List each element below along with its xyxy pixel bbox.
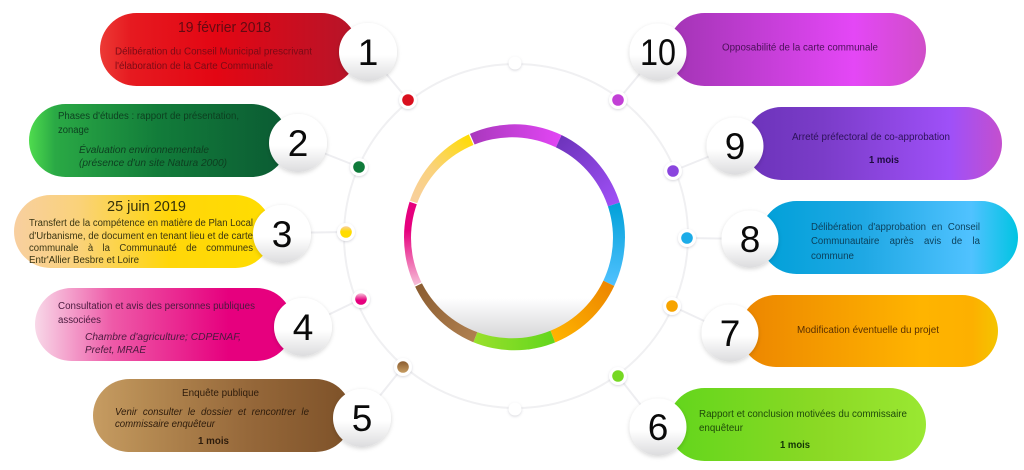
step 4 description: Prefet, MRAE — [85, 345, 146, 356]
step 2 — [29, 104, 327, 177]
step 5 description: Enquête publique — [182, 388, 259, 399]
step 1 — [100, 13, 397, 86]
number 3 — [253, 205, 311, 263]
number 9 — [706, 118, 764, 174]
step 1 date: 19 février 2018 — [178, 20, 271, 36]
step 9 description — [792, 132, 950, 166]
step 5 description: commissaire enquêteur — [115, 419, 216, 430]
step 8 description: Communautaire après avis de la — [811, 236, 980, 247]
number 6: 6 — [648, 407, 668, 448]
step 3 description: communale à la Communauté de communes — [29, 243, 253, 254]
step 1 description — [115, 46, 312, 72]
number 2: 2 — [288, 123, 308, 164]
number 7 — [702, 304, 758, 362]
step 2 description: (présence d'un site Natura 2000) — [79, 158, 227, 169]
number 1 — [339, 23, 397, 81]
step 2 description: Phases d'études : rapport de présentation, — [58, 111, 239, 122]
step 6 — [630, 388, 926, 461]
step 2 description: Évaluation environnementale — [79, 143, 209, 156]
step 6 description — [699, 409, 907, 451]
step 4 description: Chambre d'agriculture; CDPENAF, — [85, 332, 241, 343]
number 9: 9 — [725, 126, 745, 167]
number 7: 7 — [720, 313, 740, 354]
step 4 — [35, 288, 332, 361]
step 3 description: Transfert de la compétence en matière de Plan Local — [29, 218, 253, 229]
step 4 description — [58, 301, 255, 356]
step 6 description: 1 mois — [780, 440, 810, 451]
step 4 description: associées — [58, 315, 101, 326]
number 3: 3 — [272, 214, 292, 255]
number 1: 1 — [358, 32, 378, 73]
step 10 — [630, 13, 926, 86]
step 3 — [14, 195, 311, 268]
number 6 — [630, 398, 686, 456]
step 5 description: 1 mois — [198, 436, 229, 447]
step 7 — [702, 295, 998, 367]
step 5 description: Venir consulter le dossier et rencontrer le — [115, 407, 309, 418]
number 2 — [269, 114, 327, 172]
step 9 description: Arreté préfectoral de co-approbation — [792, 132, 950, 143]
step 8 description: Délibération d'approbation en Conseil — [811, 222, 980, 233]
step 6 description: enquêteur — [699, 423, 744, 434]
number 4 — [274, 298, 332, 356]
step 9 description: 1 mois — [869, 155, 899, 166]
step 5 — [93, 379, 391, 452]
step 1 description: l'élaboration de la Carte Communale — [115, 61, 273, 72]
step 10 description: Opposabilité de la carte communale — [722, 42, 878, 54]
step 5 description — [115, 388, 309, 447]
step 3 description — [29, 218, 253, 266]
step 3 date: 25 juin 2019 — [107, 199, 186, 215]
step 3 description: d'Urbanisme, de document en tenant lieu et de carte — [29, 231, 253, 242]
step 7 description: Modification éventuelle du projet — [797, 325, 939, 336]
step 8 description — [811, 222, 980, 262]
outer ring with connectors and nodes — [282, 52, 750, 427]
step 6 description: Rapport et conclusion motivées du commissaire — [699, 409, 907, 420]
number 5 — [333, 389, 391, 447]
step 8 — [722, 201, 1018, 274]
step 8 description: commune — [811, 251, 854, 262]
central coloured ring — [404, 124, 625, 350]
number 10 — [630, 24, 686, 80]
step 4 description: Consultation et avis des personnes publiques — [58, 301, 255, 312]
step 2 description — [58, 111, 239, 169]
number 8 — [722, 210, 778, 268]
step 2 description: zonage — [58, 125, 89, 136]
step 9 — [706, 107, 1002, 180]
number 4: 4 — [293, 307, 313, 348]
step 3 description: Entr'Allier Besbre et Loire — [29, 255, 139, 266]
number 5: 5 — [352, 398, 372, 439]
step 1 description: Délibération du Conseil Municipal prescrivant — [115, 46, 312, 58]
number 8: 8 — [740, 219, 760, 260]
number 10: 10 — [640, 32, 676, 73]
